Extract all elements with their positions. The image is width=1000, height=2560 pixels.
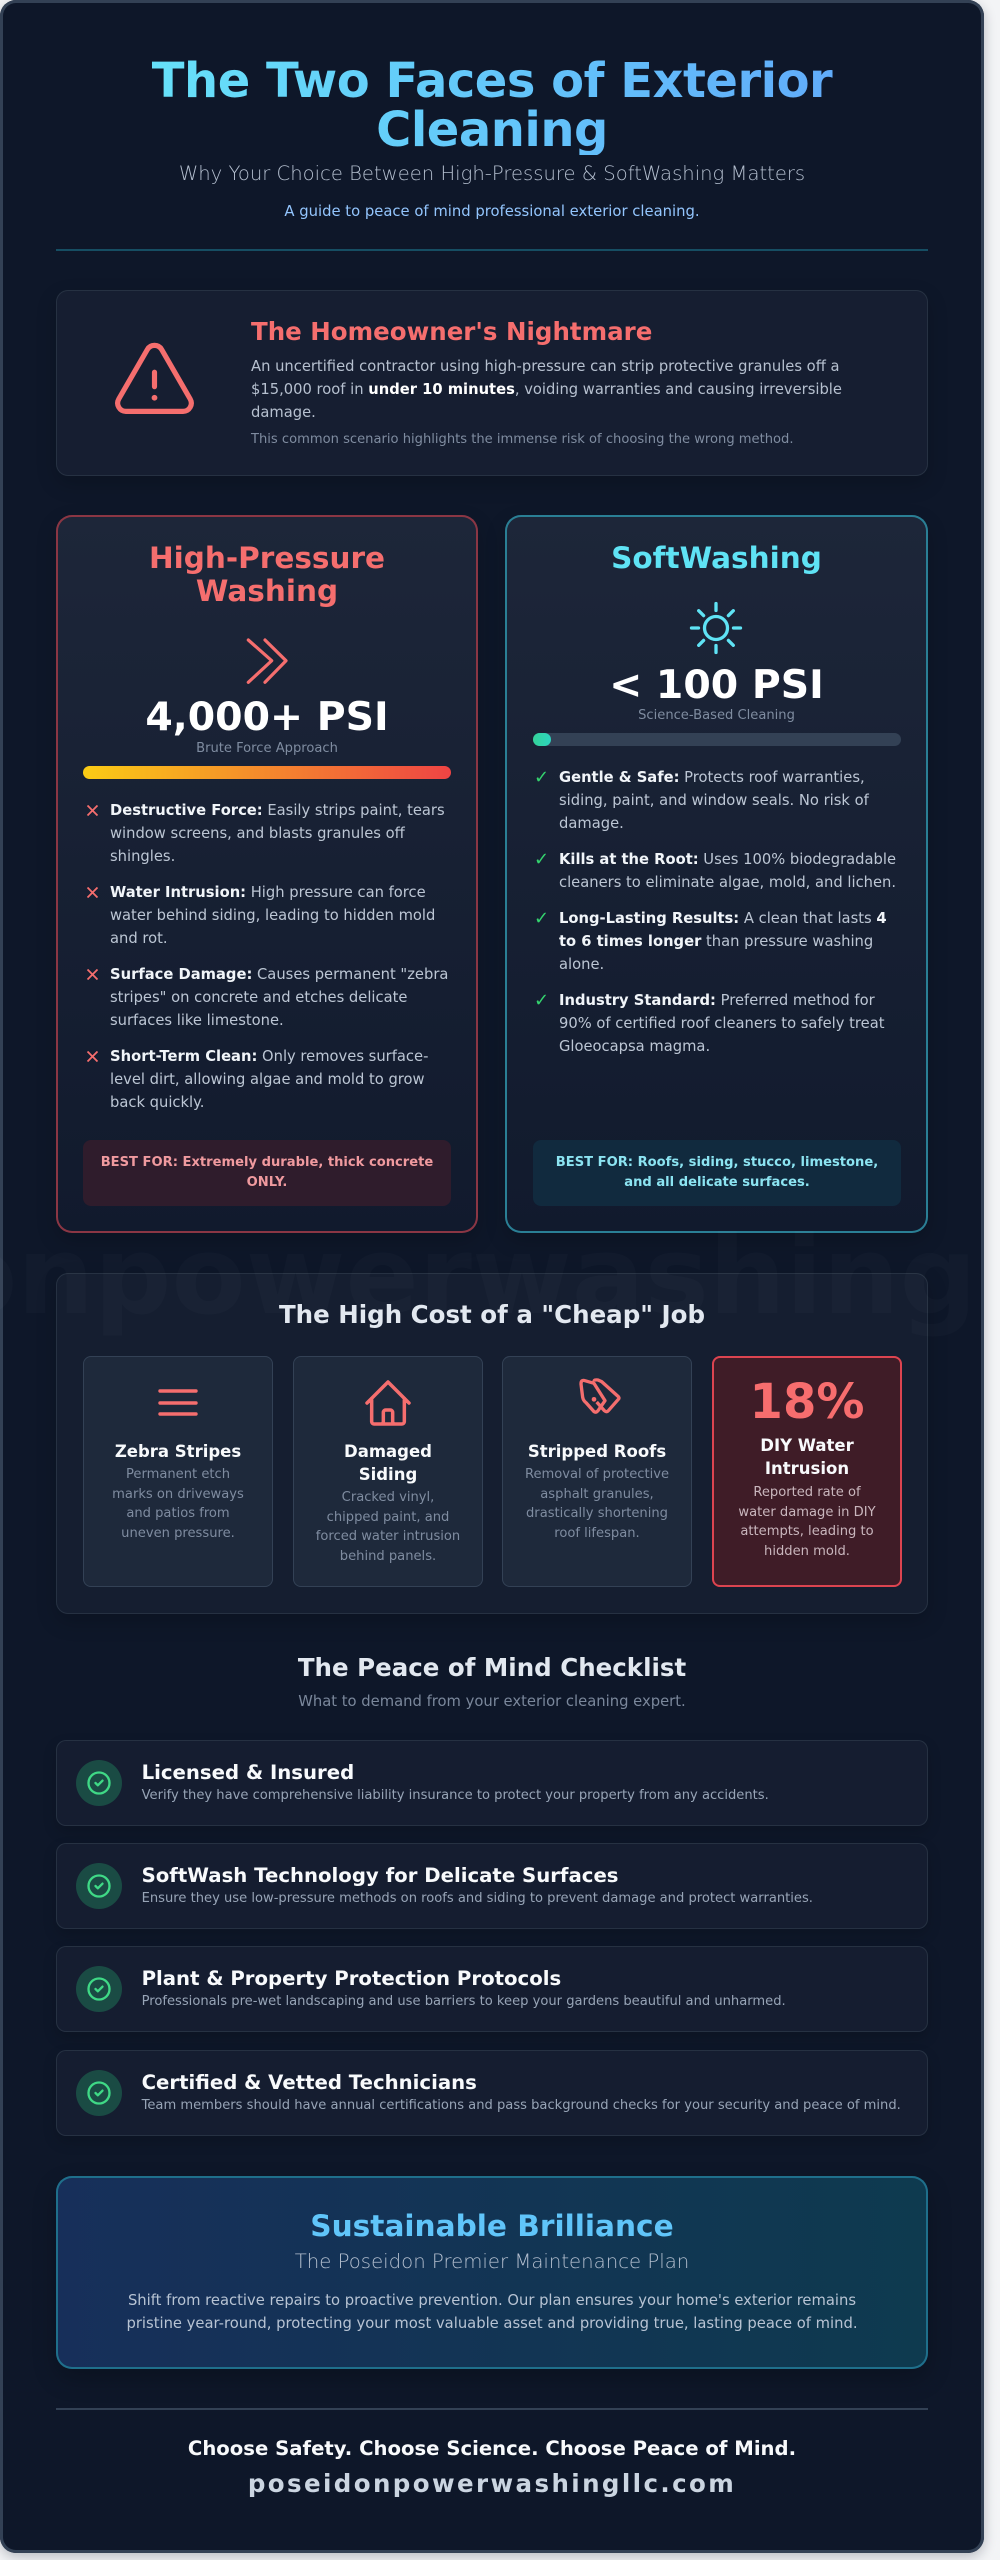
benefit item: kills at the root	[559, 851, 896, 891]
high-pressure heading: High-Pressure	[149, 541, 385, 575]
card text: uneven pressure.	[121, 1526, 235, 1541]
benefit item: industry standard	[559, 992, 885, 1055]
icon: stripes	[158, 1389, 198, 1416]
icon: check mark: ✓	[534, 908, 549, 929]
benefit item: long-lasting results: Long-Lasting Results: A clean that lasts 4	[559, 910, 887, 927]
best-for callout: and all delicate surfaces.	[624, 1175, 810, 1190]
panel: homeowner's nightmare	[56, 290, 928, 476]
benefit list	[534, 767, 896, 1055]
nightmare body text: $15,000 roof in under 10 minutes, voiding warranties and causing irreversible	[251, 380, 842, 398]
icon: check mark: ✓	[534, 767, 549, 788]
plan body: pristine year-round, protecting your most valuable asset and providing true, lasting peace of mind.	[126, 2314, 858, 2332]
title	[56, 57, 928, 155]
risk list	[87, 802, 448, 1111]
icon: sun	[690, 602, 742, 654]
risk item: water intrusion: water behind siding, leading to hidden mold	[110, 907, 435, 924]
icon: check circle	[76, 2070, 122, 2116]
card: DIY water intrusion stat	[712, 1356, 902, 1587]
benefit item: kills at the root: cleaners to eliminate algae, mold, and lichen.	[559, 874, 896, 891]
benefit item: long-lasting results	[559, 910, 887, 973]
footer divider	[56, 2408, 928, 2410]
pressure bar fill	[533, 733, 551, 746]
item title: Certified & Vetted Technicians	[142, 2070, 477, 2094]
icon: x mark	[87, 1051, 98, 1062]
panel: sustainable brilliance	[56, 2176, 928, 2369]
title: Cleaning	[376, 102, 608, 158]
nightmare note: This common scenario highlights the immense risk of choosing the wrong method.	[251, 432, 794, 447]
risk item: destructive force: window screens, and blasts granules off	[110, 825, 405, 842]
risk item: water intrusion	[110, 884, 435, 947]
benefit item: kills at the root: Kills at the Root: Uses 100% biodegradable	[559, 851, 896, 868]
icon: check mark: ✓	[534, 849, 549, 870]
best-for callout	[83, 1140, 451, 1206]
item title: Licensed & Insured	[142, 1761, 354, 1784]
card text: behind panels.	[340, 1549, 436, 1564]
risk item: surface damage	[110, 966, 448, 1029]
checklist item: plant protection	[56, 1946, 928, 2032]
item title: Plant & Property Protection Protocols	[142, 1967, 561, 1990]
item text: Ensure they use low-pressure methods on roofs and siding to prevent damage and protect warranties.	[142, 1891, 813, 1906]
cost heading: The High Cost of a "Cheap" Job	[279, 1300, 705, 1329]
benefit item: gentle and safe: siding, paint, and window seals. No risk of	[559, 792, 869, 809]
panel: high-pressure washing	[56, 515, 478, 1233]
icon: warning triangle	[115, 342, 194, 414]
pressure caption: Science-Based Cleaning	[638, 708, 795, 723]
footer slogan: Choose Safety. Choose Science. Choose Peace of Mind.	[188, 2437, 796, 2460]
risk item: destructive force	[110, 802, 445, 865]
risk item: destructive force: Destructive Force: Easily strips paint, tears	[110, 802, 445, 819]
icon: x mark	[87, 805, 98, 816]
icon: check circle	[76, 1966, 122, 2012]
benefit item: gentle and safe: damage.	[559, 815, 624, 832]
panel: the high cost	[56, 1273, 928, 1614]
icon: double chevron	[246, 638, 288, 684]
benefit item: long-lasting results: alone.	[559, 956, 604, 973]
best-for callout: ONLY.	[247, 1175, 287, 1190]
card text: roof lifespan.	[554, 1526, 640, 1541]
plan body: Shift from reactive repairs to proactive prevention. Our plan ensures your home's exterior remains	[128, 2292, 856, 2308]
tagline: A guide to peace of mind professional exterior cleaning.	[284, 203, 700, 220]
icon: check circle	[76, 1863, 122, 1909]
card text: Cracked vinyl,	[342, 1490, 434, 1505]
pressure value: < 100 PSI	[609, 662, 824, 708]
card text: chipped paint, and	[327, 1510, 449, 1525]
risk item: short-term clean: Short-Term Clean: Only removes surface-	[110, 1048, 428, 1065]
checklist item: certified	[56, 2050, 928, 2136]
card title: Zebra Stripes	[115, 1442, 241, 1460]
icon: check mark: ✓	[534, 990, 549, 1011]
card text: Reported rate of	[753, 1485, 861, 1500]
pressure value: 4,000+ PSI	[145, 694, 389, 740]
checklist heading: The Peace of Mind Checklist	[298, 1653, 686, 1682]
card title	[760, 1436, 854, 1478]
best-for callout: BEST FOR: Roofs, siding, stucco, limestone,	[556, 1155, 878, 1170]
benefit item: long-lasting results: to 6 times longer than pressure washing	[559, 933, 873, 950]
footer website: poseidonpowerwashingllc.com	[248, 2469, 736, 2498]
checklist item: softwash	[56, 1843, 928, 1929]
card text: forced water intrusion	[316, 1529, 460, 1544]
card title: Siding	[359, 1464, 417, 1484]
card: stripped roofs	[502, 1356, 692, 1587]
item text: Team members should have annual certifications and pass background checks for your security and peace of mind.	[142, 2098, 901, 2112]
high-pressure heading	[149, 541, 385, 608]
benefit item: gentle and safe: Gentle & Safe: Protects roof warranties,	[559, 769, 865, 786]
benefit item: industry standard: 90% of certified roof cleaners to safely treat	[559, 1015, 885, 1032]
card text: marks on driveways	[112, 1487, 244, 1502]
benefit item: industry standard: Gloeocapsa magma.	[559, 1038, 710, 1055]
risk item: water intrusion: Water Intrusion: High pressure can force	[110, 884, 426, 901]
best-for callout	[533, 1140, 901, 1206]
header divider	[56, 249, 928, 251]
card text	[112, 1467, 244, 1541]
card title: Stripped Roofs	[528, 1442, 666, 1460]
nightmare body text: An uncertified contractor using high-pressure can strip protective granules off a	[251, 358, 840, 374]
item title: SoftWash Technology for Delicate Surfaces	[142, 1864, 619, 1887]
card text: water damage in DIY	[738, 1505, 876, 1520]
card text: attempts, leading to	[740, 1524, 874, 1539]
subtitle: Why Your Choice Between High-Pressure & SoftWashing Matters	[179, 162, 805, 185]
icon: x mark	[87, 969, 98, 980]
softwashing heading: SoftWashing	[611, 541, 822, 575]
title: The Two Faces of Exterior	[152, 53, 832, 109]
nightmare heading: The Homeowner's Nightmare	[251, 317, 652, 346]
card text: Removal of protective	[525, 1467, 669, 1482]
item text: Professionals pre-wet landscaping and use barriers to keep your gardens beautiful and unharmed.	[142, 1994, 786, 2009]
icon: check circle	[76, 1760, 122, 1806]
checklist item: licensed	[56, 1740, 928, 1826]
card title	[344, 1442, 432, 1484]
card: damaged siding	[293, 1356, 483, 1587]
panel: softwashing	[505, 515, 928, 1233]
high-pressure heading: Washing	[196, 574, 338, 608]
card text: Permanent etch	[126, 1467, 230, 1482]
card text: asphalt granules,	[540, 1487, 654, 1502]
risk item: short-term clean: back quickly.	[110, 1094, 204, 1111]
checklist subheading: What to demand from your exterior cleaning expert.	[298, 1693, 686, 1710]
risk item: short-term clean: level dirt, allowing algae and mold to grow	[110, 1071, 425, 1088]
card text: hidden mold.	[764, 1544, 850, 1559]
card text	[738, 1485, 876, 1559]
benefit item: industry standard: Industry Standard: Preferred method for	[559, 992, 875, 1009]
risk item: short-term clean	[110, 1048, 428, 1111]
risk item: water intrusion: and rot.	[110, 930, 168, 947]
stat number: 18%	[750, 1374, 864, 1430]
nightmare body text: damage.	[251, 404, 316, 420]
best-for callout: BEST FOR: Extremely durable, thick concrete	[101, 1155, 433, 1170]
card text	[525, 1467, 669, 1541]
card title: Damaged	[344, 1442, 432, 1460]
nightmare body text	[251, 358, 842, 420]
card title: Intrusion	[765, 1458, 849, 1478]
pressure bar track	[533, 733, 901, 746]
icon: house	[365, 1380, 411, 1426]
card text	[316, 1490, 460, 1564]
risk item: surface damage: Surface Damage: Causes permanent "zebra	[110, 966, 448, 983]
plan body	[126, 2292, 858, 2332]
plan subtitle: The Poseidon Premier Maintenance Plan	[295, 2250, 689, 2273]
plan heading: Sustainable Brilliance	[310, 2209, 674, 2243]
card title: DIY Water	[760, 1436, 854, 1454]
card: zebra stripes	[83, 1356, 273, 1587]
card text: and patios from	[126, 1506, 230, 1521]
icon: tags	[579, 1378, 621, 1414]
risk item: surface damage: surfaces like limestone.	[110, 1012, 284, 1029]
risk item: destructive force: shingles.	[110, 848, 175, 865]
risk item: surface damage: stripes" on concrete and etches delicate	[110, 989, 407, 1006]
benefit item: gentle and safe	[559, 769, 870, 832]
item text: Verify they have comprehensive liability insurance to protect your property from any accidents.	[142, 1788, 769, 1803]
pressure caption: Brute Force Approach	[196, 741, 338, 756]
icon: x mark	[87, 887, 98, 898]
pressure bar	[83, 766, 451, 779]
card text: drastically shortening	[526, 1506, 668, 1521]
header	[56, 53, 928, 251]
footer	[56, 2408, 928, 2498]
